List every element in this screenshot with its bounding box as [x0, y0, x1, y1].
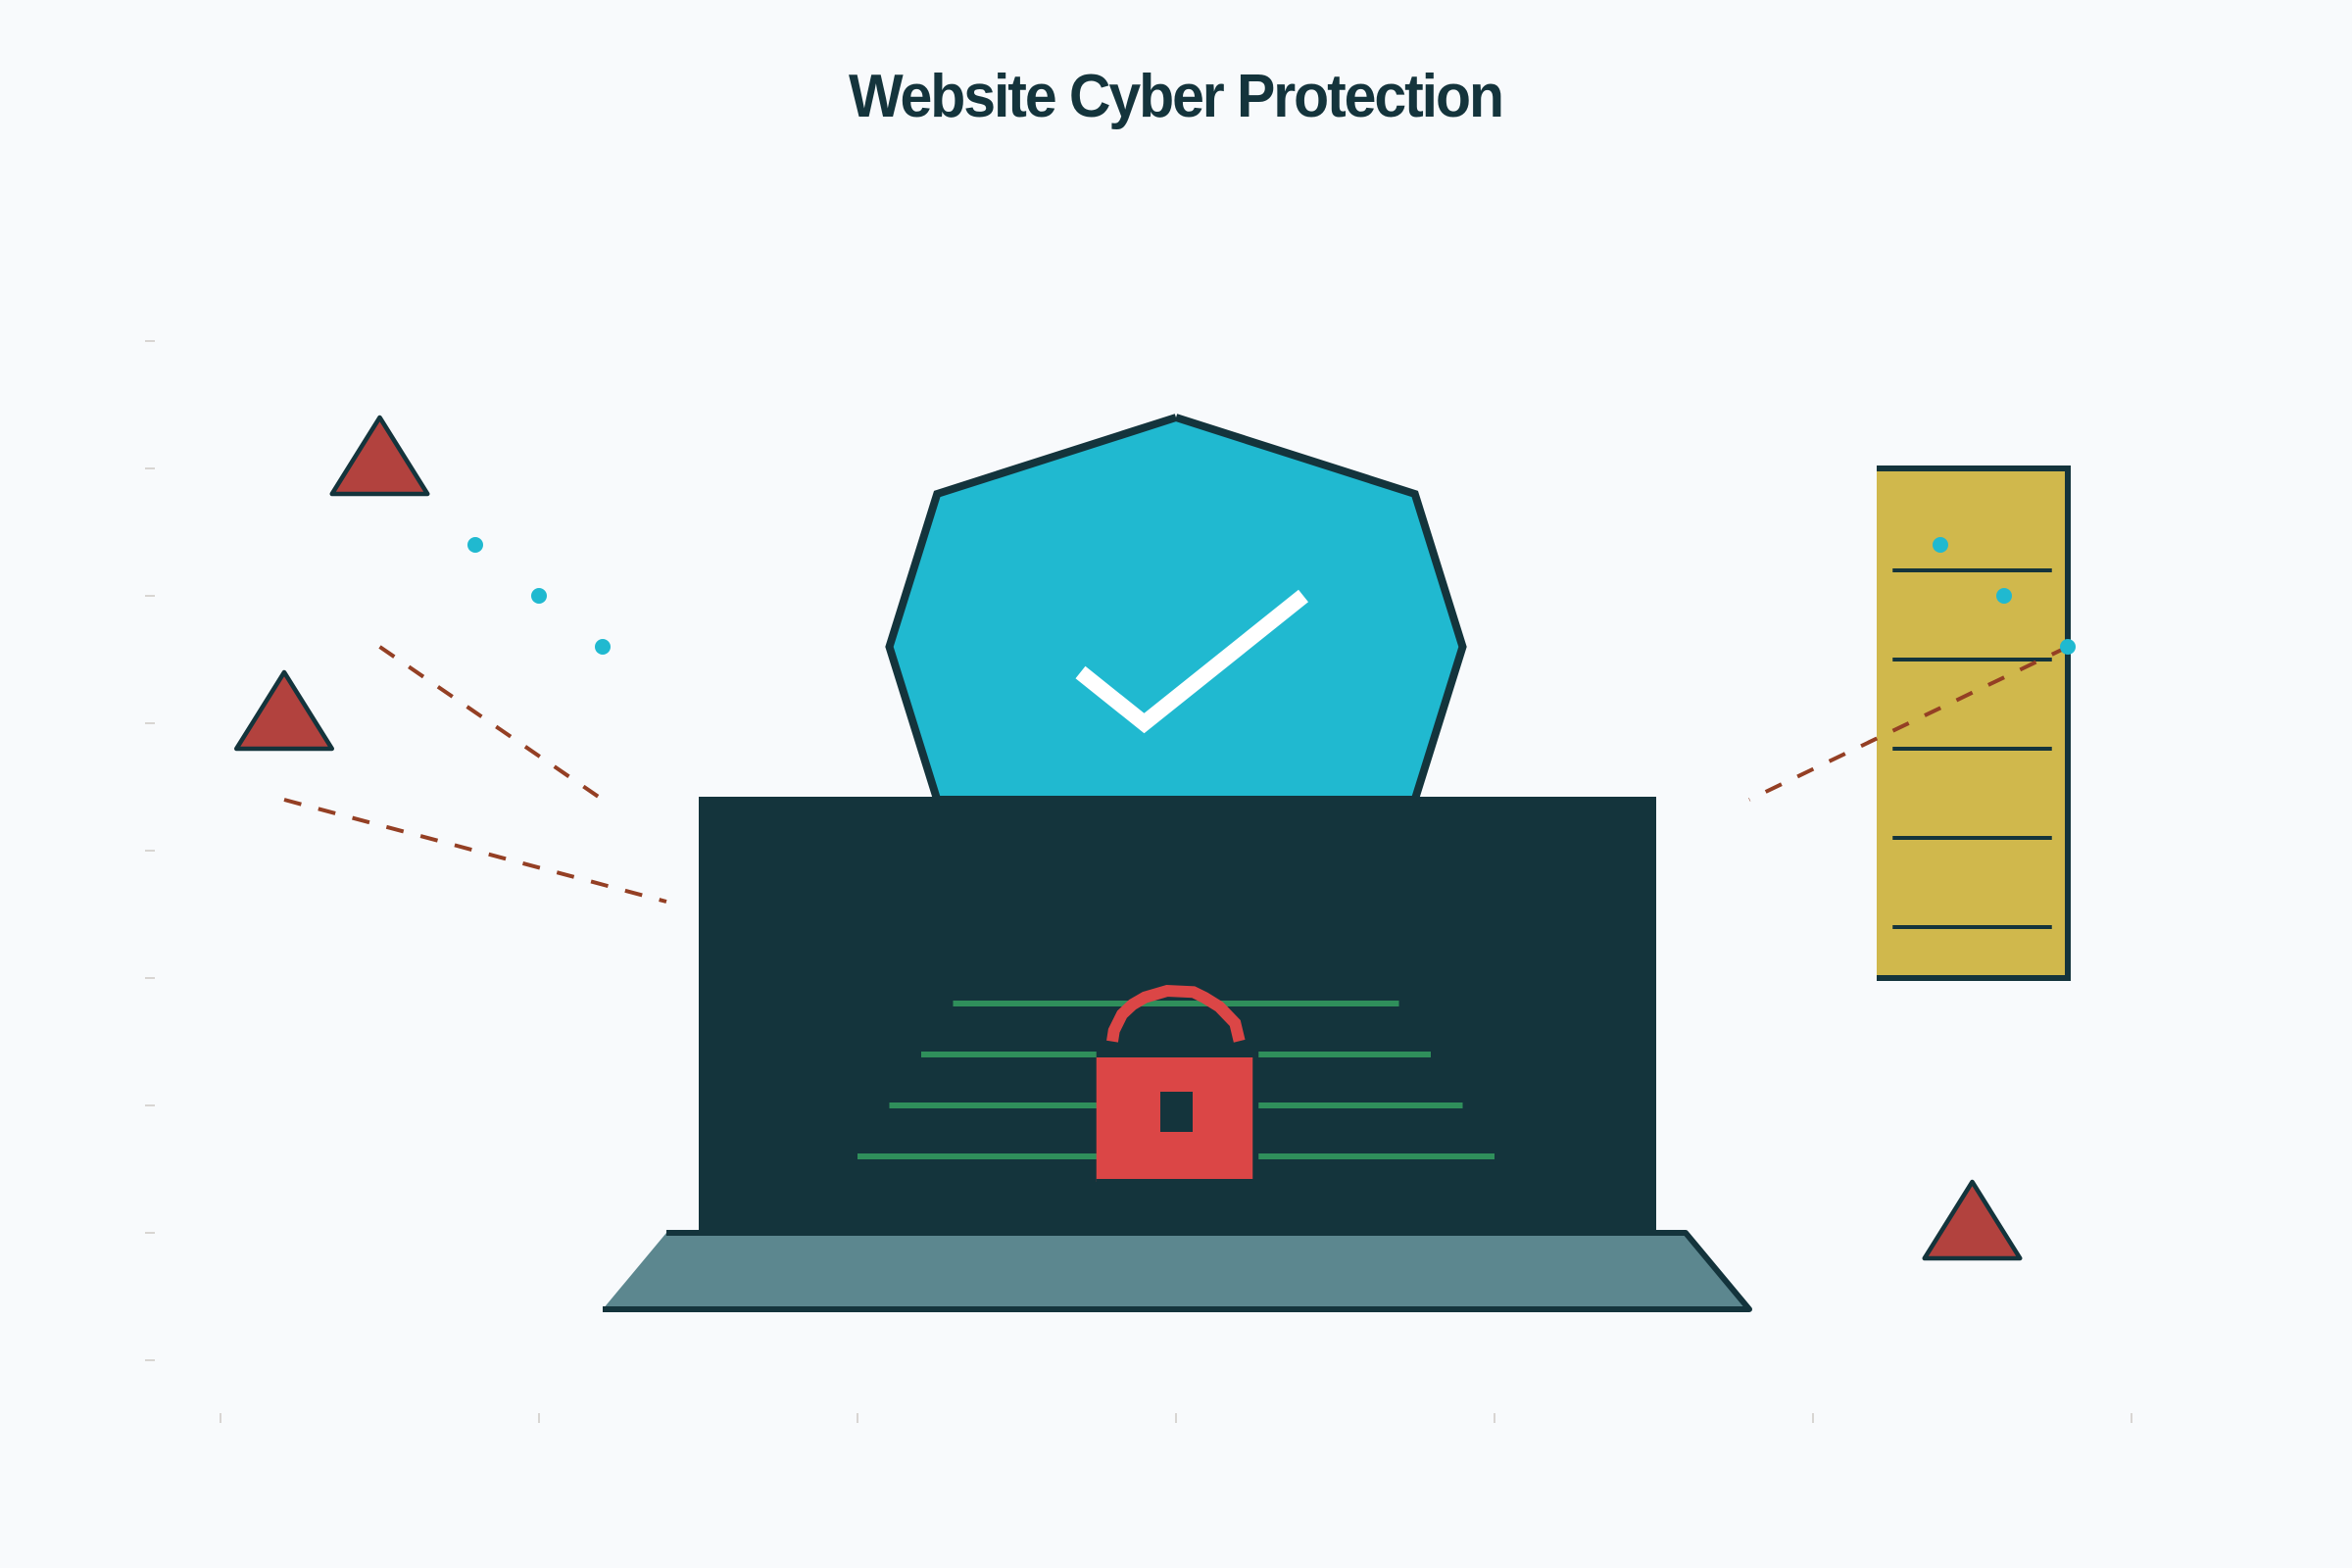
attack path: lower left dashed arrow	[284, 800, 666, 902]
laptop screen	[699, 797, 1656, 1233]
laptop	[603, 797, 1749, 1309]
padlock	[1097, 991, 1255, 1182]
server body	[1877, 468, 2068, 978]
padlock body	[1097, 1054, 1255, 1182]
data dots right	[1933, 537, 2076, 655]
attack path: upper left dashed arrow	[380, 647, 603, 800]
check mark	[1080, 596, 1303, 723]
title: Website Cyber Protection	[849, 62, 1504, 129]
padlock shackle	[1112, 991, 1240, 1042]
laptop base	[603, 1233, 1749, 1309]
shield body	[890, 417, 1462, 800]
icon: threat triangle middle left	[236, 672, 332, 749]
server shelf lines	[1892, 570, 2052, 927]
icon: shield with check	[890, 417, 1462, 800]
icon: threat triangle top left	[332, 417, 427, 494]
attack path: right dashed arrow	[1749, 647, 2068, 800]
axis ticks	[145, 341, 2132, 1423]
server rack	[1877, 468, 2068, 978]
code lines on screen	[858, 1004, 1494, 1156]
padlock keyhole	[1160, 1092, 1193, 1132]
icon: threat triangle bottom right	[1925, 1182, 2020, 1258]
data dots left	[467, 537, 611, 655]
